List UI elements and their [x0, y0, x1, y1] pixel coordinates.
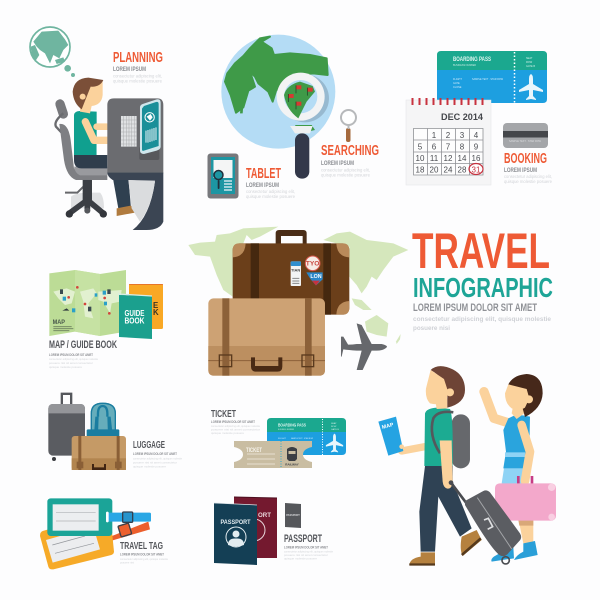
heading: luggage: LUGGAGE	[133, 439, 165, 451]
icon: calendar: 8	[460, 142, 465, 152]
icon: calendar: 1	[432, 131, 437, 140]
text: planning caption: consectetur adipiscing elit,	[113, 74, 162, 78]
text: tag caption: consectetur adipiscing elit, quisque molestie	[120, 557, 168, 561]
icon: boarding pass small: BUSINESS NUMBER	[278, 429, 294, 431]
icon: guide books	[118, 284, 163, 339]
heading: searching: SEARCHING	[321, 143, 379, 159]
icon: boarding pass	[437, 51, 547, 103]
heading: planning: PLANNING	[113, 49, 163, 66]
icon: boarding pass: FLIGHT	[453, 78, 462, 81]
icon: bank card: SAMPLE TEXT · STAR ROW	[509, 140, 542, 143]
panel: ticket	[211, 408, 346, 468]
icon: calendar: 9	[474, 142, 479, 152]
title block	[412, 223, 553, 332]
icon: boarding pass: BOARDING PASS	[453, 57, 491, 63]
text: map caption: LOREM IPSUM DOLOR SIT AMET	[49, 353, 94, 357]
icon: red passport: ORT	[258, 513, 271, 519]
text: searching caption: LOREM IPSUM	[321, 160, 354, 167]
icon: boarding pass: SEAT	[526, 57, 533, 60]
brown suitcase: TYO	[306, 261, 319, 268]
icon: guide books: GUIDE	[124, 309, 144, 318]
icon: boarding pass small: ROW	[331, 426, 337, 428]
icon: calendar: DEC 2014	[441, 112, 484, 123]
icon: calendar: 5	[418, 142, 423, 152]
icon: guide books: BOOK	[124, 316, 145, 326]
icon: calendar: 4	[474, 131, 479, 140]
icon: globe with magnifier	[221, 35, 335, 179]
text: passport caption: LOREM IPSUM DOLOR SIT AMET	[284, 546, 329, 550]
illustration: world map with suitcases and plane	[188, 227, 408, 376]
icon: boarding pass small: SEAT	[331, 422, 337, 425]
figure: woman	[484, 374, 556, 562]
icon: thought globe	[30, 27, 75, 77]
heading: passport: PASSPORT	[284, 533, 322, 545]
icon: boarding pass: BUSINESS NUMBER	[453, 63, 477, 67]
heading: ticket: TICKET	[211, 408, 236, 420]
icon: boarding pass small	[267, 418, 346, 455]
icon: folded map: MAP	[53, 319, 65, 326]
figure: man	[402, 366, 482, 566]
icon: guide books: E	[153, 301, 158, 310]
world map	[188, 227, 408, 344]
icon: calendar: 10	[416, 154, 425, 163]
brown suitcase: TIAN	[291, 268, 300, 273]
icon: calendar: 28	[458, 166, 467, 174]
body text: consectetur adipiscing elit, quisque molestie	[413, 316, 551, 323]
text: ticket caption: LOREM IPSUM DOLOR SIT AMET	[211, 420, 256, 424]
icon: person at desk	[55, 78, 163, 230]
text: map caption	[49, 353, 98, 369]
tagline: LOREM IPSUM DOLOR SIT AMET	[413, 302, 537, 314]
icon: calendar: 16	[472, 154, 481, 163]
text: tag caption: posuere nisi	[120, 560, 134, 564]
icon: plane	[341, 323, 387, 370]
icon: map held by man	[378, 417, 404, 456]
panel: searching	[221, 35, 379, 179]
icon: map held by man: MAP	[381, 422, 395, 431]
text: tablet caption: quisque molestie posuere	[246, 194, 295, 199]
icon: boarding pass small: BOARDING PASS	[278, 422, 306, 428]
icon: small passport: PASSPORT	[286, 514, 300, 517]
text: map caption: posuere nisi sit amet consectetur	[49, 361, 93, 365]
icon: calendar: 2	[446, 131, 451, 140]
icon: boarding pass: SAMPLE TEXT · STAR ROW	[472, 78, 504, 81]
icon: calendar: 7	[446, 142, 451, 152]
text: tablet caption: consectetur adipiscing elit,	[246, 189, 295, 194]
panel: planning	[30, 27, 163, 230]
text: passport caption: quisque molestie posuere	[284, 556, 317, 560]
text: passport caption	[284, 546, 333, 560]
icon: luggage tags	[40, 498, 151, 569]
icon: calendar: 24	[444, 166, 453, 174]
icon: calendar: 18	[416, 166, 425, 174]
icon: tablet	[208, 154, 238, 198]
icon: small magnifier	[341, 110, 356, 142]
text: searching caption: quisque molestie posuere	[321, 172, 370, 178]
icon: boarding pass small: FLIGHT	[278, 438, 286, 440]
icon: calendar: 3	[460, 131, 465, 140]
icon: rolling suitcase	[449, 480, 521, 564]
illustration: travellers	[378, 366, 556, 566]
heading: booking: BOOKING	[504, 151, 547, 167]
text: passport caption: consectetur adipiscing elit, quisque molestie	[284, 550, 333, 554]
icon: boarding pass: GATE	[453, 82, 460, 85]
icon: guide books: K	[153, 308, 159, 317]
text: luggage caption: consectetur adipiscing elit, quisque molestie	[133, 456, 182, 460]
text: tablet caption: LOREM IPSUM	[246, 182, 279, 189]
text: luggage caption	[133, 452, 182, 468]
tan suitcase	[208, 298, 325, 376]
panel: tablet	[208, 154, 295, 199]
text: ticket caption	[211, 420, 260, 435]
text: planning caption	[113, 66, 162, 84]
text: ticket caption: quisque molestie posuere	[211, 431, 244, 435]
icon: calendar	[406, 98, 491, 185]
icon: blue passport: PASSPORT	[220, 519, 251, 526]
text: booking caption	[504, 167, 552, 184]
text: passport caption: posuere nisi sit amet consectetur	[284, 553, 328, 557]
heading: travel tag: TRAVEL TAG	[120, 540, 163, 552]
text: booking caption: LOREM IPSUM	[504, 167, 537, 174]
body text	[413, 316, 551, 332]
text: planning caption: LOREM IPSUM	[113, 66, 146, 73]
panel: booking	[406, 51, 552, 185]
icon: calendar: 12	[444, 154, 453, 163]
brown suitcase	[233, 230, 349, 315]
icon: boarding pass: GATE B	[526, 65, 535, 68]
icon: boarding pass: ROW	[526, 61, 533, 64]
text: tablet caption	[246, 182, 295, 199]
icon: boarding pass: CLOSE	[453, 86, 462, 89]
panel: passport	[214, 497, 333, 565]
icon: calendar: 11	[430, 154, 439, 163]
icon: calendar: 6	[432, 142, 437, 152]
text: searching caption: consectetur adipiscing elit,	[321, 168, 370, 172]
icon: train ticket	[234, 441, 312, 468]
panel: travel tag	[40, 498, 168, 569]
body text: posuere nisi	[413, 325, 450, 332]
text: map caption: consectetur adipiscing elit, quisque molestie	[49, 357, 98, 361]
text: map caption: quisque molestie posuere	[49, 365, 82, 369]
panel: map and guide book	[49, 270, 163, 369]
icon: boarding pass small: GATE B	[331, 428, 339, 431]
heading: map guide book: MAP / GUIDE BOOK	[49, 339, 117, 351]
icon: calendar: 14	[458, 154, 467, 163]
brown suitcase: LON	[310, 274, 322, 280]
text: tag caption	[120, 552, 168, 564]
icon: train ticket: TICKET	[246, 448, 262, 454]
icon: train ticket: RAILWAY	[285, 462, 299, 466]
icon: calendar: 31	[472, 166, 481, 174]
icon: calendar: 20	[430, 166, 439, 174]
text: luggage caption: LOREM IPSUM DOLOR SIT AMET	[133, 452, 178, 456]
text: planning caption: quisque molestie posuere	[113, 78, 162, 84]
heading: tablet: TABLET	[246, 166, 281, 182]
text: ticket caption: consectetur adipiscing elit, quisque molestie	[211, 424, 260, 428]
text: searching caption	[321, 160, 370, 178]
text: ticket caption: posuere nisi sit amet consectetur	[211, 428, 260, 432]
icon: bank card	[503, 123, 548, 148]
text: luggage caption: quisque molestie posuere	[133, 464, 166, 468]
icon: luggage group	[48, 393, 126, 470]
text: luggage caption: posuere nisi sit amet consectetur	[133, 460, 177, 464]
text: booking caption: consectetur adipiscing elit,	[504, 174, 552, 179]
panel: luggage	[48, 393, 182, 470]
icon: boarding pass small: SAMPLE TEXT · STAR ROW	[291, 437, 314, 440]
text: booking caption: quisque molestie posuere	[504, 179, 552, 184]
text: tag caption: LOREM IPSUM DOLOR SIT AMET	[120, 552, 165, 556]
